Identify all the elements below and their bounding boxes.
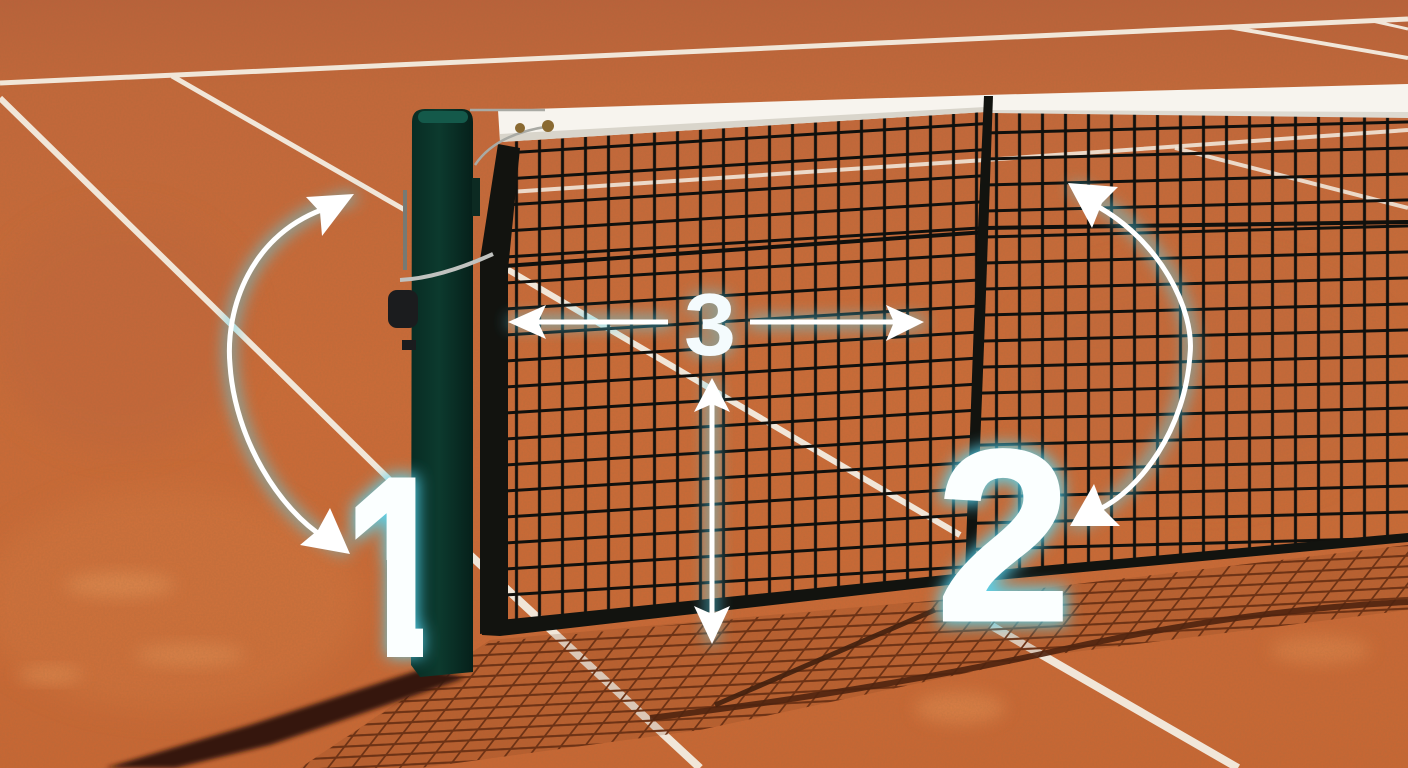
net mesh: left section <box>508 112 983 620</box>
post shadow <box>105 668 465 768</box>
number 1: 1 <box>344 423 449 712</box>
net post <box>388 109 554 677</box>
glow behind numbers and arrows: 3 <box>684 275 736 374</box>
arrow: curved double arrow at post (1) <box>229 194 354 554</box>
net top white band <box>498 84 1408 142</box>
shadow of post and net on court <box>105 545 1408 768</box>
arrow: horizontal double arrow (3) <box>508 305 924 341</box>
number 3: 3 <box>684 275 736 374</box>
net bottom band and side tape <box>480 96 1408 636</box>
glow behind numbers and arrows <box>229 188 1190 712</box>
arrow: vertical double arrow (3) <box>694 378 730 644</box>
arrow: curved double arrow at centre strap (2) <box>1068 183 1190 526</box>
glow behind numbers and arrows: 2 <box>936 399 1071 672</box>
winder and cable hardware <box>388 290 418 328</box>
net mesh: right section <box>970 100 1408 580</box>
number 2: 2 <box>936 399 1071 672</box>
glow behind numbers and arrows: 1 <box>344 423 449 712</box>
